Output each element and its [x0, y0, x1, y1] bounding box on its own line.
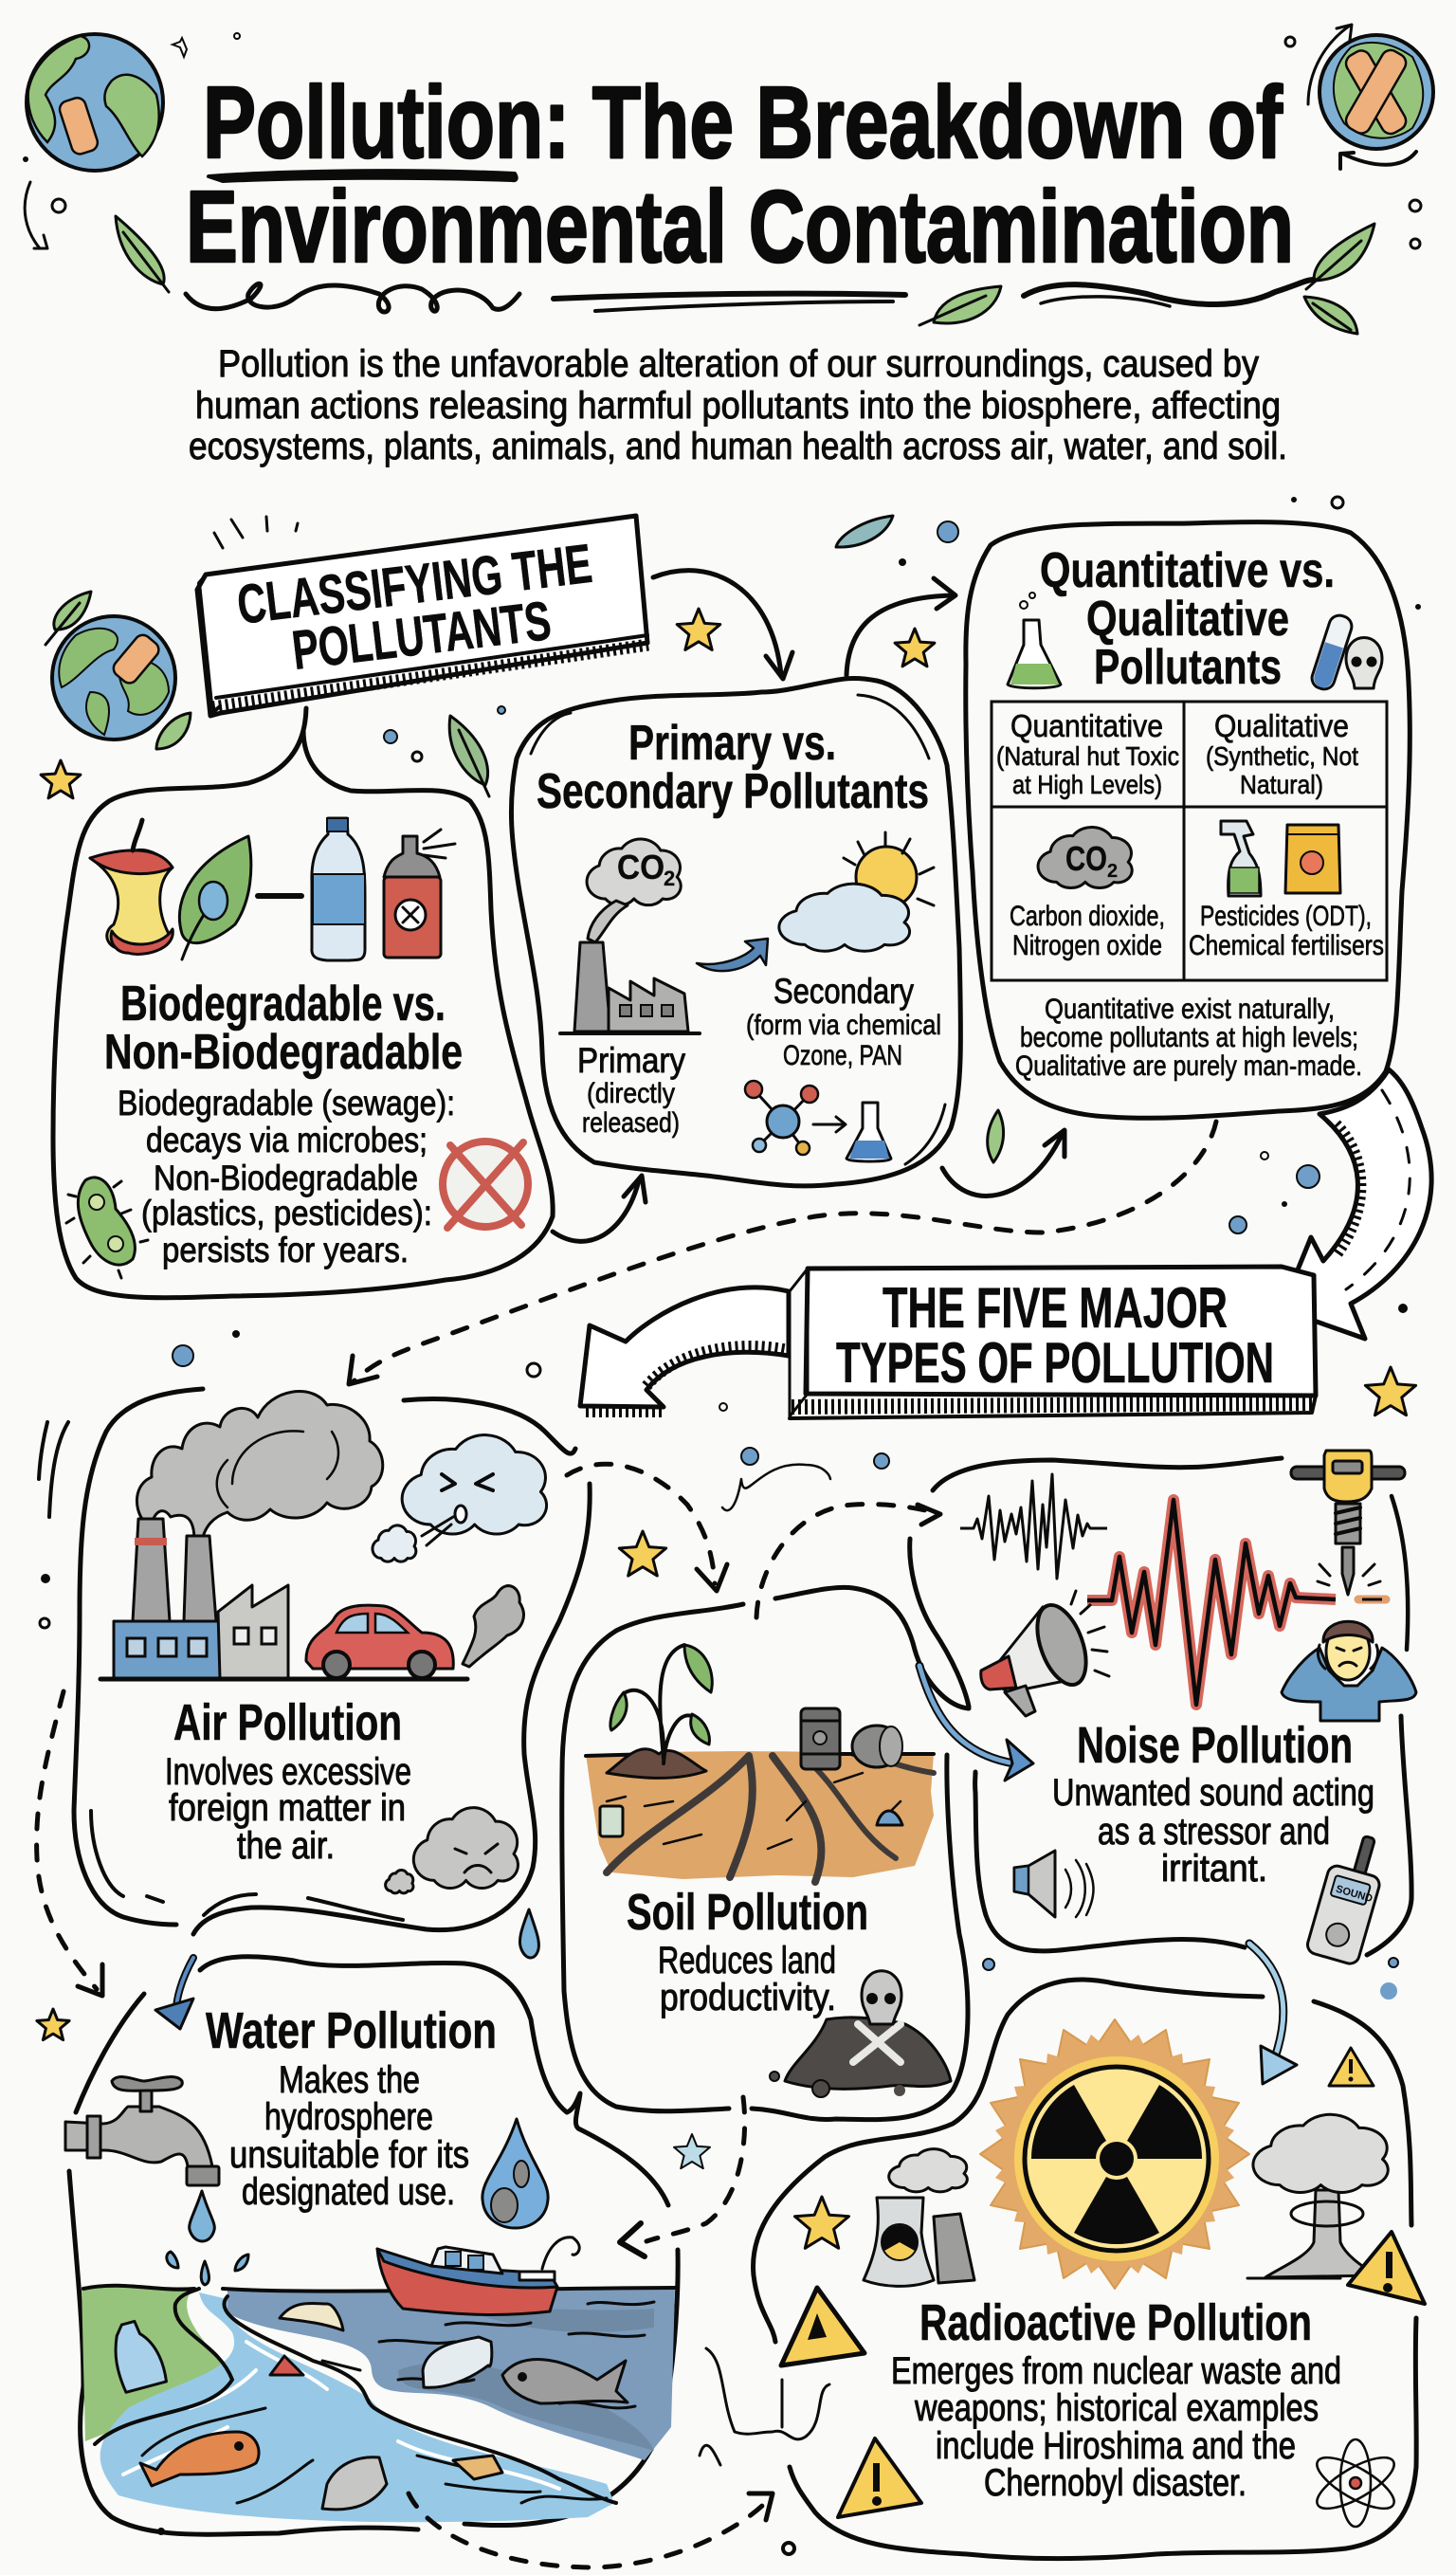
icon: sound meter: SOUND [1335, 1884, 1374, 1905]
arrow: dashed water to radioactive [409, 2493, 773, 2567]
icon: exhaust smoke [463, 1586, 523, 1667]
description: productivity. [660, 1977, 836, 2018]
heading: Pollutants [1094, 640, 1282, 695]
icon: factory with CO2 [560, 839, 700, 1033]
leaf: globe bottom [156, 713, 191, 749]
icon: jackhammer [1291, 1451, 1405, 1595]
arrow: blue primary to secondary [697, 939, 768, 971]
sea [228, 2289, 675, 2460]
icon: warning triangle top [1329, 2048, 1374, 2086]
banner: the five major types of pollution: TYPES OF POLLUTION [836, 1331, 1274, 1395]
description [118, 1084, 455, 1269]
description: include Hiroshima and the [936, 2425, 1296, 2467]
description: Biodegradable (sewage): [118, 1084, 455, 1123]
icon: warning triangle right [1348, 2232, 1425, 2304]
sea shading [398, 2309, 654, 2451]
icon: radiation warning triangle [781, 2288, 864, 2365]
accent stroke [531, 695, 945, 1164]
heading: Air Pollution [173, 1694, 402, 1751]
heading: Qualitative [1086, 592, 1289, 647]
description [658, 1940, 836, 2018]
panel: biodegradable [53, 708, 553, 1298]
icon: cooling towers [864, 2149, 974, 2286]
heading [1040, 543, 1335, 695]
description: hydrosphere [264, 2096, 433, 2138]
arrow: primary to quantitative [846, 578, 956, 675]
heading: Biodegradable vs. [120, 977, 446, 1032]
river [100, 2292, 614, 2522]
table [992, 702, 1387, 980]
icon: CO2 cloud: CO [1065, 839, 1107, 878]
icon: test tube [1309, 612, 1355, 692]
table cell: examples qualitative: Chemical fertilisers [1189, 930, 1384, 961]
icon: warning triangle bottom [838, 2438, 921, 2517]
description [891, 2350, 1341, 2504]
arrow: orbit bottom right [1340, 152, 1416, 169]
icon: faucet [65, 2077, 219, 2185]
icon: bottle on land [107, 2317, 167, 2393]
description [1052, 1772, 1374, 1890]
description: irritant. [1161, 1848, 1267, 1890]
description: Unwanted sound acting [1052, 1772, 1374, 1814]
icon: sad cloud [386, 1808, 518, 1893]
title underline [209, 171, 517, 181]
icon: green flask [1008, 593, 1061, 688]
panel: primary vs secondary [511, 678, 960, 1186]
label: primary: released) [582, 1107, 680, 1139]
description: Involves excessive [165, 1751, 411, 1793]
chart: large red sound wave [1087, 1500, 1386, 1705]
arrow: dashed left side to water [37, 1691, 102, 1996]
description: unsuitable for its [229, 2134, 469, 2176]
title [186, 64, 1294, 283]
arrow: blue into water panel [155, 1958, 193, 2029]
icon: radiation sun [980, 2019, 1249, 2289]
icon: factory smoke [136, 1392, 383, 1545]
splash drops [167, 2252, 248, 2285]
label: secondary: (form via chemical [746, 1010, 941, 1041]
label: primary: (directly [587, 1078, 675, 1109]
description: weapons; historical examples [914, 2387, 1319, 2429]
leaf: panel gap [449, 716, 489, 796]
note: become pollutants at high levels; [1020, 1022, 1358, 1053]
table header: qualitative: Qualitative [1214, 708, 1349, 743]
debris: floating dome [280, 2303, 343, 2330]
panel: water pollution [65, 1957, 678, 2534]
heading [537, 716, 929, 819]
table cell: examples quantitative: Carbon dioxide, [1010, 901, 1165, 932]
description: Reduces land [658, 1940, 836, 1981]
icon: factory with CO2: CO [617, 848, 664, 886]
banner: classifying the pollutants [197, 516, 648, 716]
banner: the five major types of pollution [790, 1267, 1316, 1418]
heading: Radioactive Pollution [919, 2294, 1312, 2351]
shoreline strokes [83, 2286, 675, 2503]
icon: globe with bandage [52, 616, 175, 740]
label: secondary: Ozone, PAN [783, 1040, 902, 1071]
leaf: center [919, 286, 1001, 325]
icon: barrels [801, 1708, 902, 1769]
table header: quantitative [996, 708, 1179, 799]
icon: blue drop between panels [519, 1909, 538, 1958]
table cell: examples qualitative: Pesticides (ODT), [1200, 901, 1372, 932]
water ripples [142, 2302, 654, 2503]
heading: Soil Pollution [627, 1884, 868, 1941]
icon: atom [1310, 2439, 1401, 2527]
description: persists for years. [162, 1231, 409, 1269]
description: as a stressor and [1098, 1811, 1330, 1853]
icon: red car [306, 1605, 453, 1678]
description: decays via microbes; [146, 1121, 428, 1160]
heading: Quantitative vs. [1040, 543, 1335, 598]
land [82, 2287, 232, 2441]
icon: fertiliser bag [1285, 825, 1340, 893]
heading: Non-Biodegradable [104, 1025, 463, 1080]
arrow: banner to primary [653, 571, 792, 679]
stars [37, 609, 1416, 2168]
icon: microbe [66, 1178, 148, 1278]
debris: plastic bag [423, 2337, 492, 2387]
decoration: squiggle [722, 1465, 830, 1510]
icon: cloud and sun [779, 832, 934, 951]
icon: crossed-out circle [443, 1141, 528, 1228]
arrow: biodegradable to primary [553, 1176, 646, 1241]
description [229, 2059, 469, 2213]
panel: radioactive pollution [754, 1980, 1425, 2558]
icon: orange fish [140, 2432, 259, 2486]
description: designated use. [242, 2171, 455, 2213]
heading: Primary vs. [628, 716, 836, 771]
icon: bandaged globe left [27, 34, 163, 171]
note [1015, 994, 1362, 1082]
table cell: examples quantitative: Nitrogen oxide [1012, 930, 1162, 961]
arrow: dashed soil to noise [756, 1505, 940, 1617]
icon: bandaged globe right [1320, 35, 1433, 149]
leaf: right lower [1304, 297, 1357, 334]
arrow: primary to note [942, 1130, 1065, 1196]
illustration: polluted river scene [82, 2237, 675, 2522]
description [165, 1751, 411, 1867]
arrow: swirl left [25, 182, 47, 248]
icon: factory [100, 1519, 467, 1679]
label: secondary [746, 972, 941, 1071]
arrow: blue noise to radioactive [1249, 1944, 1297, 2084]
leaf: left [116, 216, 169, 292]
label: primary: Primary [577, 1041, 685, 1080]
boat [377, 2237, 579, 2314]
arrow: orbit top right [1308, 25, 1352, 104]
leaf: globe top [46, 592, 91, 645]
note: Quantitative exist naturally, [1045, 994, 1335, 1025]
debris: crate [322, 2457, 387, 2510]
decoration: squiggle bottom [700, 2348, 829, 2465]
icon: mushroom cloud [1247, 2114, 1388, 2278]
description: Emerges from nuclear waste and [891, 2350, 1341, 2392]
heading: Water Pollution [206, 2002, 497, 2059]
leaf: teal lower [988, 1110, 1004, 1162]
accent strokes [39, 1422, 403, 1920]
table header: quantitative: Quantitative [1010, 708, 1163, 743]
icon: factory with CO2: 2 [664, 867, 675, 890]
table header: qualitative: Natural) [1240, 770, 1323, 799]
description: foreign matter in [169, 1787, 406, 1829]
description: the air. [237, 1825, 335, 1867]
label: primary [577, 1041, 685, 1139]
arrow: dashed to air pollution [349, 1122, 1216, 1384]
panel: noise pollution [910, 1451, 1416, 1965]
heading [104, 977, 463, 1080]
table cell: examples quantitative [1010, 901, 1165, 961]
debris: box [453, 2456, 502, 2479]
label: secondary: Secondary [774, 972, 914, 1011]
table header: quantitative: at High Levels) [1012, 770, 1162, 799]
arrow: white curved to five major [1282, 1069, 1431, 1339]
icon: falling drop [190, 2191, 214, 2241]
icon: person covering ears [1282, 1621, 1416, 1721]
flourish right [1024, 280, 1314, 306]
table header: qualitative: (Synthetic, Not [1206, 741, 1358, 771]
debris: buoy [270, 2356, 303, 2375]
table header: quantitative: (Natural hut Toxic [996, 741, 1179, 771]
icon: spray bottle [1221, 821, 1261, 896]
icon: cracked soil [586, 1749, 934, 1882]
table header: qualitative [1206, 708, 1358, 799]
chart: small sound wave [960, 1474, 1107, 1579]
banner: classifying the pollutants: POLLUTANTS [289, 590, 555, 682]
icon: skull [1346, 637, 1382, 688]
banner: classifying the pollutants: CLASSIFYING THE [234, 533, 595, 636]
dash between biodegradable and non-biodegradable [258, 893, 301, 899]
icon: wilting plant [610, 1645, 712, 1763]
table cell: examples qualitative [1189, 901, 1384, 961]
arrow: blue soil to noise [919, 1666, 1033, 1781]
description: Chernobyl disaster. [984, 2462, 1247, 2504]
header [25, 25, 1433, 467]
panel: quantitative vs qualitative [966, 522, 1410, 1118]
icon: water bottle [312, 818, 365, 960]
star: left of plant [794, 2197, 849, 2248]
icon: skull on rubble [770, 1971, 951, 2097]
intro paragraph: Pollution is the unfavorable alteration of our surroundings, caused by [218, 343, 1259, 385]
description: Makes the [279, 2059, 420, 2101]
icon: grey fish [502, 2360, 628, 2403]
intro paragraph [189, 343, 1287, 467]
arrow: dashed radioactive to water [620, 2097, 745, 2256]
banner: the five major types of pollution: THE FIVE MAJOR [883, 1276, 1228, 1340]
flourish lines [554, 294, 905, 311]
flourish left [186, 283, 519, 312]
icon: CO2 cloud: 2 [1107, 861, 1118, 882]
icon: spray can [384, 830, 455, 958]
leaf: right upper [1306, 224, 1374, 289]
intro paragraph: human actions releasing harmful pollutants into the biosphere, affecting [195, 385, 1281, 427]
highlights [123, 2342, 559, 2489]
note: Qualitative are purely man-made. [1015, 1050, 1362, 1082]
icon: molecule to flask [745, 1081, 891, 1161]
leaf: teal top [836, 516, 893, 547]
icon: polluted drop [482, 2119, 548, 2228]
panel: air pollution [39, 1389, 590, 1934]
description: Non-Biodegradable [154, 1159, 418, 1197]
intro paragraph: ecosystems, plants, animals, and human health across air, water, and soil. [189, 426, 1287, 467]
arrow: white curved to air [580, 1288, 789, 1413]
heading: Noise Pollution [1077, 1717, 1353, 1774]
arrow: dashed air to soil [567, 1464, 727, 1591]
accent ticks near banner [214, 517, 298, 548]
icon: apple core [90, 820, 173, 954]
icon: speaker [1014, 1851, 1094, 1917]
heading: Secondary Pollutants [537, 764, 929, 819]
icon: megaphone [981, 1591, 1109, 1716]
icon: CO2 cloud [1038, 827, 1132, 888]
icon: sound meter [1305, 1829, 1392, 1965]
description: (plastics, pesticides): [141, 1194, 432, 1233]
panel: soil pollution [562, 1587, 969, 2120]
icon: coughing cloud [373, 1435, 547, 1561]
icon: leaf with microbe [179, 836, 251, 959]
